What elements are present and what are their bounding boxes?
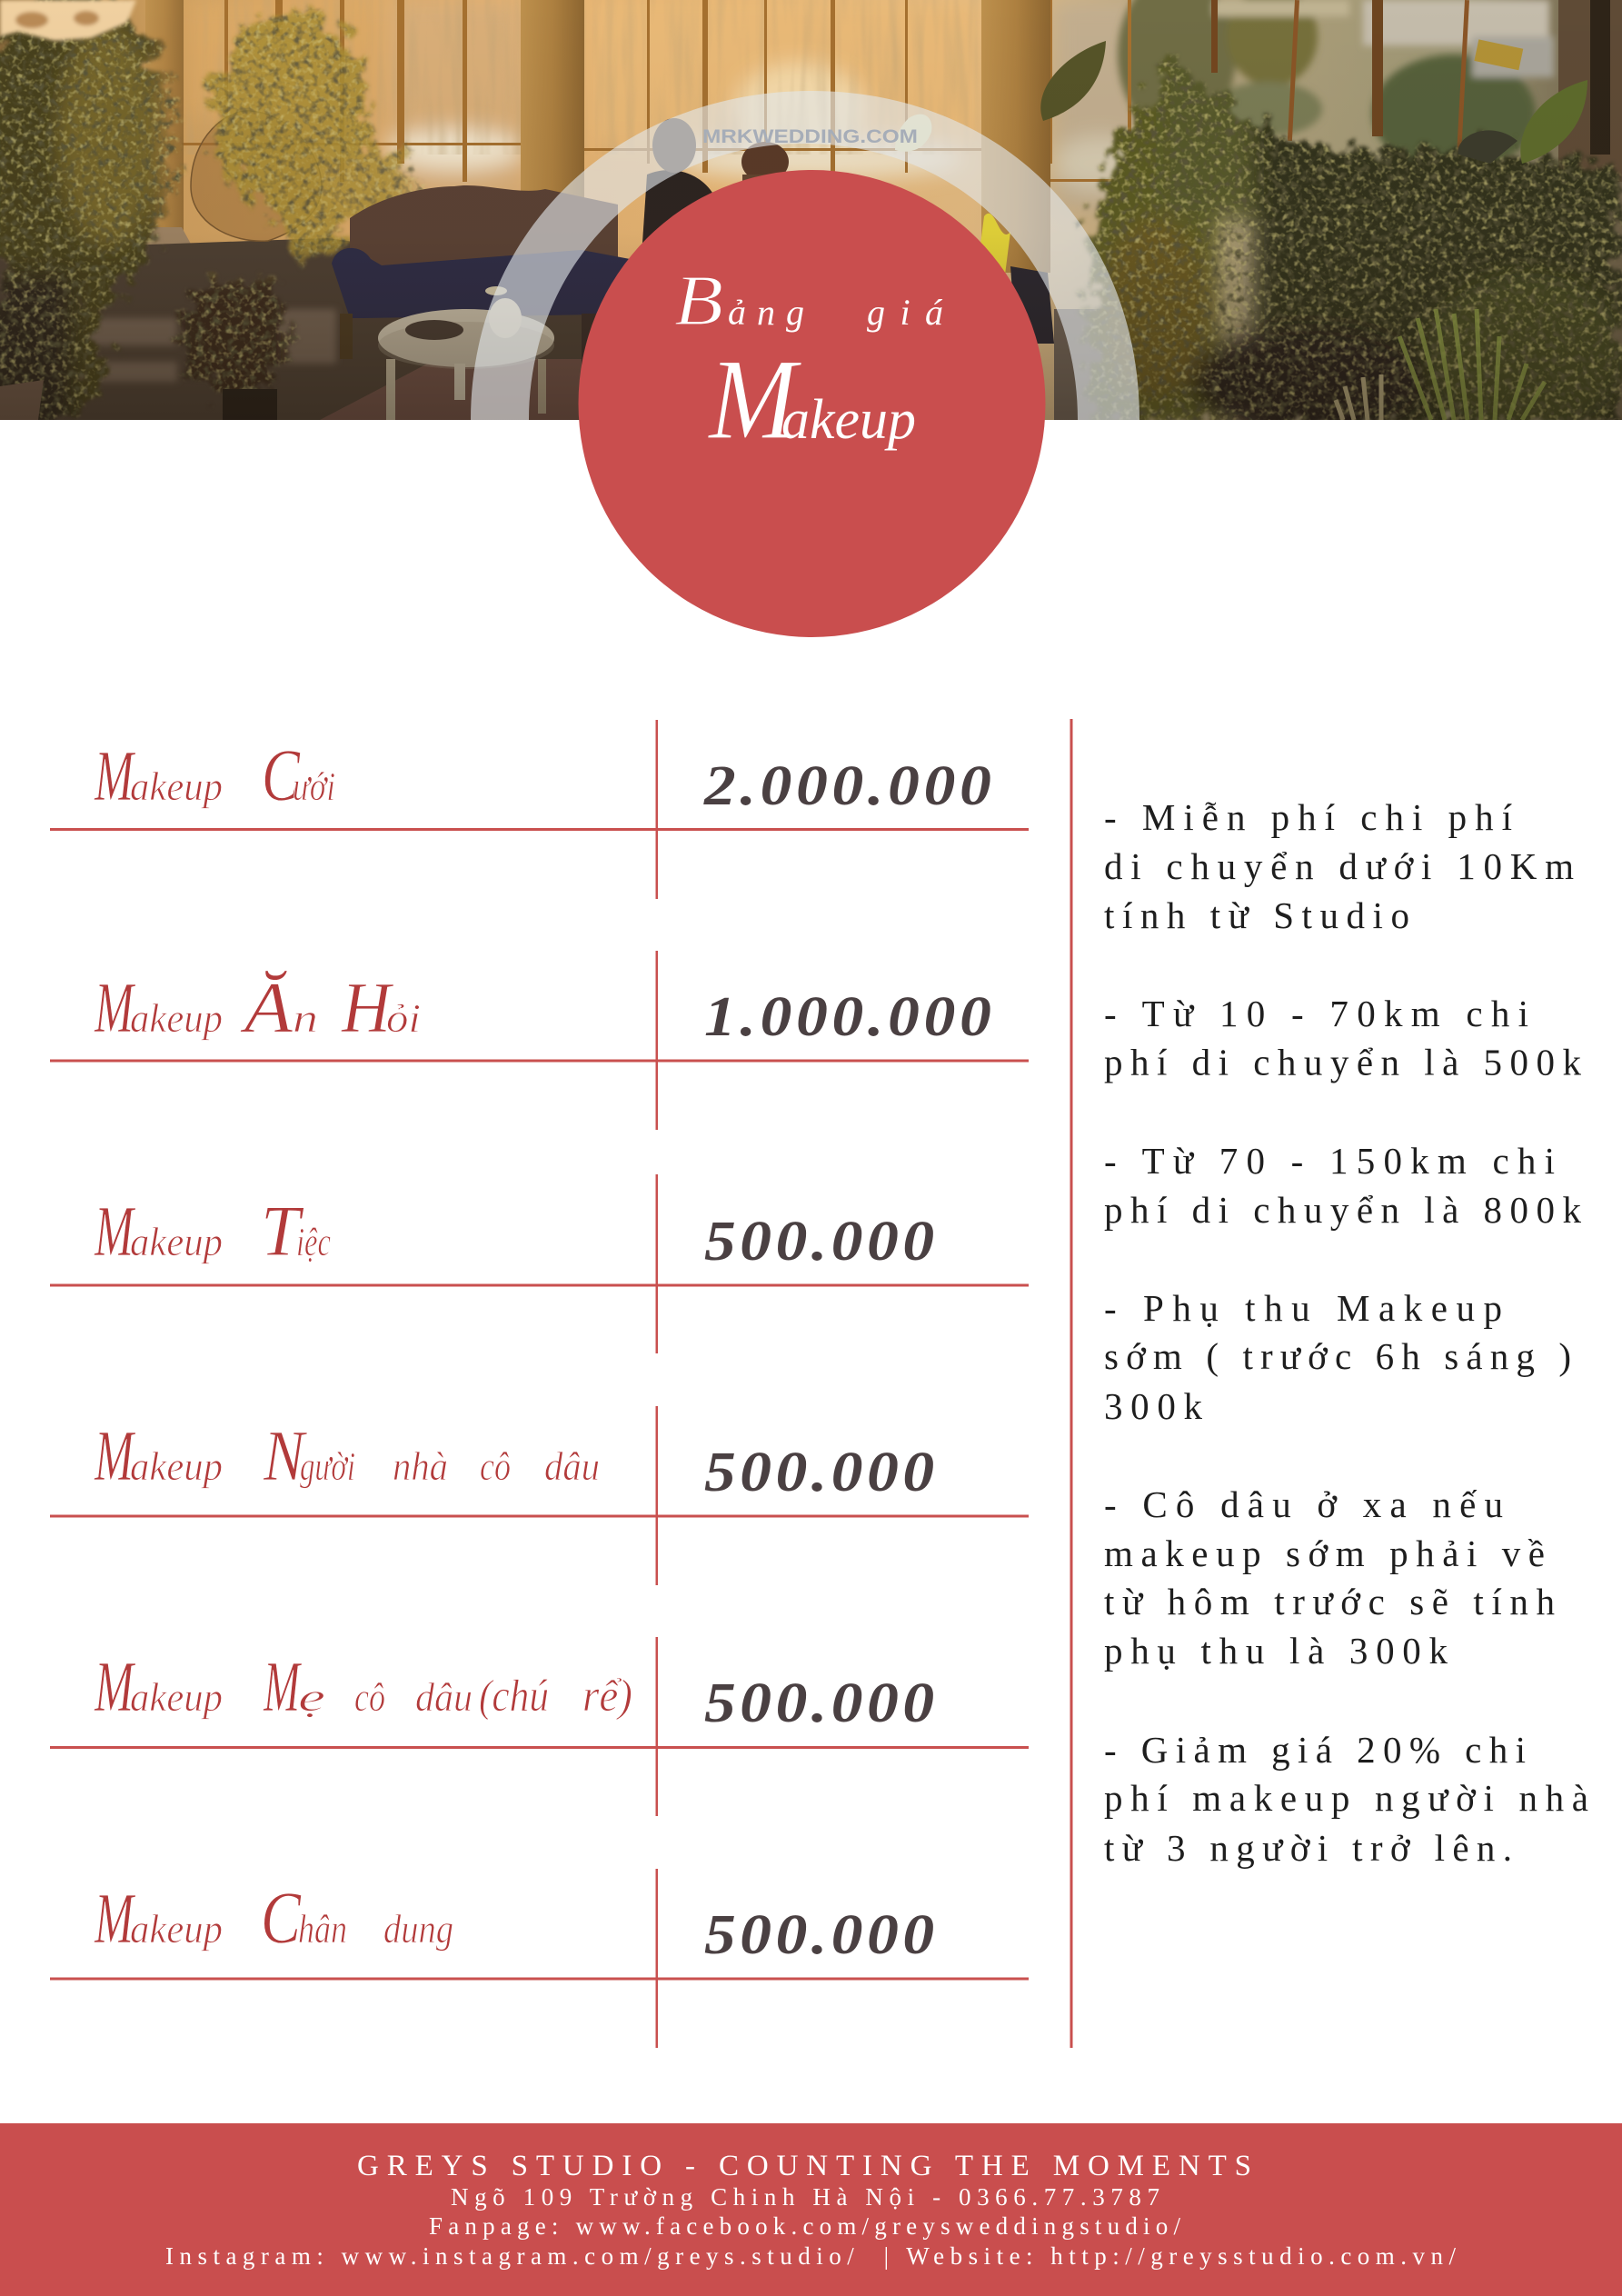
row: Makeup Tiệc: T [261, 1193, 304, 1272]
row: Makeup Chân dung: 500.000 [704, 1903, 934, 1966]
row: Makeup Mẹ cô dâu (chú rể): 500.000 [704, 1672, 934, 1734]
watermark: MRKWEDDING.COM [702, 126, 918, 147]
foliage masses [0, 0, 1622, 454]
row: Makeup Người nhà cô dâu: cô [480, 1444, 511, 1489]
row: Makeup Cưới: C [262, 734, 301, 816]
note: early makeup: 300k [1104, 1385, 1203, 1427]
row: Makeup Người nhà cô dâu: dâu [544, 1444, 600, 1489]
coffee table [378, 286, 554, 420]
footer instagram and website: Instagram: www.instagram.com/greys.studio/ | Website: http://greysstudio.com.vn/ [165, 2242, 1456, 2270]
couple [642, 118, 789, 244]
title circle [578, 170, 1045, 637]
row: Makeup Mẹ cô dâu (chú rể): (chú [479, 1670, 549, 1721]
note: far bride: từ hôm trước sẽ tính [1104, 1581, 1555, 1622]
fan palm [1336, 374, 1381, 420]
note: free travel: - Miễn phí chi phí [1104, 796, 1512, 838]
title: Bảng giá: ảng [728, 292, 804, 333]
note: 70-150km: phí di chuyển là 800k [1104, 1189, 1581, 1231]
title: Makeup: akeup [781, 389, 916, 451]
row: Makeup Người nhà cô dâu: N [263, 1417, 308, 1496]
title: Makeup [707, 336, 916, 464]
note: free travel [1104, 796, 1574, 936]
row: Makeup Mẹ cô dâu (chú rể): M [94, 1648, 136, 1727]
floor [0, 238, 1145, 420]
note: early makeup [1104, 1287, 1571, 1427]
row: Makeup Ăn Hỏi: n [293, 996, 318, 1041]
row: Makeup Mẹ cô dâu (chú rể): akeup [130, 1675, 223, 1720]
lamp leaves and large plant leaves [895, 41, 1587, 282]
columns [138, 0, 1050, 273]
note: far bride [1104, 1483, 1555, 1672]
row: Makeup Ăn Hỏi: akeup [130, 996, 223, 1041]
row: Makeup Người nhà cô dâu: M [94, 1417, 136, 1496]
row: Makeup Chân dung [50, 1869, 1029, 2048]
row: Makeup Tiệc [50, 1174, 1029, 1353]
row: Makeup Ăn Hỏi: 1.000.000 [704, 985, 991, 1048]
note: 10-70km [1104, 993, 1581, 1083]
note: free travel: di chuyển dưới 10Km [1104, 845, 1574, 887]
row: Makeup Chân dung: akeup [130, 1907, 223, 1952]
row: Makeup Tiệc: iệc [296, 1220, 331, 1264]
column divider [1070, 719, 1072, 2048]
footer address: Ngõ 109 Trường Chinh Hà Nội - 0366.77.3787 [451, 2183, 1159, 2211]
row: Makeup Ăn Hỏi [50, 951, 1029, 1130]
row: Makeup Mẹ cô dâu (chú rể): dâu [415, 1675, 473, 1720]
row: Makeup Ăn Hỏi: ỏi [386, 996, 421, 1041]
translucent arch over photo [471, 91, 1139, 420]
row: Makeup Chân dung: dung [383, 1907, 453, 1952]
flower pots [0, 380, 277, 420]
row: Makeup Người nhà cô dâu: 500.000 [704, 1441, 934, 1503]
row: Makeup Ăn Hỏi: H [341, 969, 394, 1048]
price table [50, 720, 1029, 2048]
row: Makeup Mẹ cô dâu (chú rể): ẹ [298, 1675, 325, 1720]
row: Makeup Cưới: M [94, 737, 136, 816]
right wall [1558, 0, 1622, 182]
window mullions [182, 0, 1469, 182]
row: Makeup Người nhà cô dâu: gười [300, 1444, 355, 1489]
note: far bride: makeup sớm phải về [1104, 1532, 1545, 1574]
row: Makeup Cưới: akeup [130, 764, 223, 809]
row: Makeup Tiệc: 500.000 [704, 1210, 934, 1273]
row: Makeup Chân dung: M [94, 1880, 136, 1959]
note: 10-70km: phí di chuyển là 500k [1104, 1042, 1581, 1083]
sofa [332, 185, 1054, 365]
note: discount: phí makeup người nhà [1104, 1777, 1588, 1819]
row: Makeup Tiệc: akeup [130, 1220, 223, 1264]
rug [320, 359, 582, 420]
row: Makeup Mẹ cô dâu (chú rể): rể) [582, 1670, 632, 1721]
row: Makeup Chân dung: hân [298, 1907, 347, 1952]
row: Makeup Tiệc: M [94, 1193, 136, 1272]
title: Bảng giá: B [674, 262, 723, 341]
row: Makeup Ăn Hỏi: Ă [240, 969, 294, 1048]
footer band [0, 2123, 1622, 2296]
row: Makeup Mẹ cô dâu (chú rể): cô [354, 1675, 385, 1720]
footer slogan: GREYS STUDIO - COUNTING THE MOMENTS [357, 2150, 1251, 2182]
footer fanpage: Fanpage: www.facebook.com/greysweddingstudio/ [429, 2212, 1180, 2240]
row: Makeup Cưới: 2.000.000 [703, 754, 991, 817]
row: Makeup Chân dung: C [261, 1876, 302, 1959]
note: early makeup: - Phụ thu Makeup [1104, 1287, 1502, 1329]
note: discount: từ 3 người trở lên. [1104, 1827, 1512, 1869]
row: Makeup Cưới: ưới [293, 764, 335, 809]
photo banner: lounge with plants and couple [0, 0, 1622, 454]
note: 70-150km: - Từ 70 - 150km chi [1104, 1140, 1555, 1182]
note: early makeup: sớm ( trước 6h sáng ) [1104, 1335, 1571, 1377]
notes on surcharges [1104, 796, 1588, 1869]
chandelier [0, 0, 136, 41]
note: 10-70km: - Từ 10 - 70km chi [1104, 993, 1528, 1034]
row: Makeup Người nhà cô dâu: akeup [130, 1444, 223, 1489]
note: discount [1104, 1729, 1588, 1869]
row: Makeup Ăn Hỏi: M [94, 969, 136, 1048]
note: free travel: tính từ Studio [1104, 894, 1409, 936]
note: 70-150km [1104, 1140, 1581, 1231]
title: Bảng giá [674, 262, 943, 341]
row: Makeup Người nhà cô dâu: nhà [393, 1444, 448, 1489]
note: far bride: phụ thu là 300k [1104, 1630, 1448, 1672]
row: Makeup Người nhà cô dâu [50, 1406, 1029, 1585]
palm fronds [1399, 309, 1545, 420]
note: discount: - Giảm giá 20% chi [1104, 1729, 1526, 1771]
note: far bride: - Cô dâu ở xa nếu [1104, 1483, 1503, 1525]
outdoor trees and buildings [1118, 0, 1554, 173]
row: Makeup Mẹ cô dâu (chú rể): M [263, 1648, 303, 1727]
row: Makeup Mẹ cô dâu (chú rể) [50, 1637, 1029, 1816]
title: Bảng giá: giá [867, 292, 943, 333]
title: Makeup: M [707, 336, 802, 464]
row: Makeup Cưới [50, 720, 1029, 899]
window haze streaks [182, 0, 981, 155]
peacock chair [191, 111, 322, 241]
